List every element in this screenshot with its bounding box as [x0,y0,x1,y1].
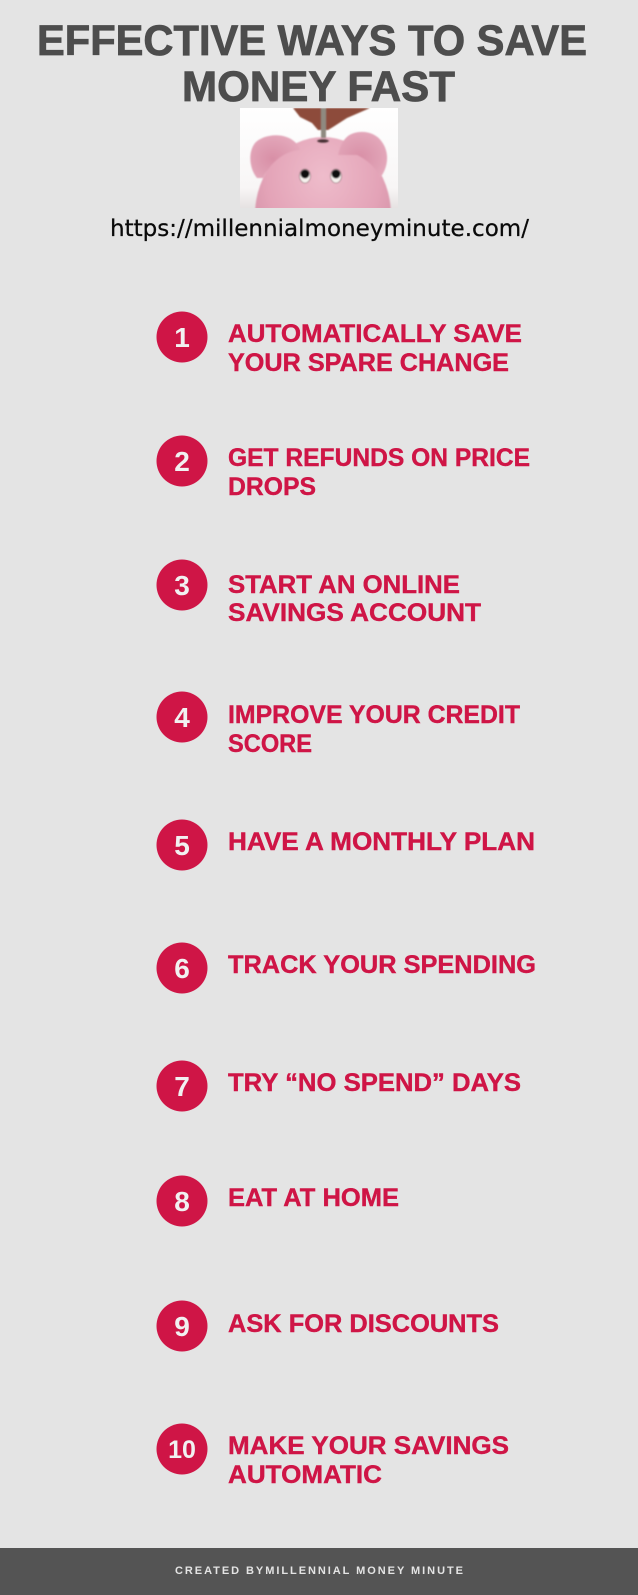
item 4: 4 [174,702,190,733]
item 5: 5 [174,830,190,861]
item 2: 2 [174,446,190,477]
footer: CREATED BYMILLENNIAL MONEY MINUTE [175,1565,463,1577]
item 3: SAVINGS ACCOUNT [228,599,481,627]
item 5 [156,820,535,870]
title [37,17,587,111]
item 6: 6 [174,953,190,984]
icon: coin slot [317,139,329,143]
item 4: SCORE [228,730,312,758]
image: piggy bank with coin [240,108,398,208]
icon: left eye [300,169,310,183]
icon: right ear [338,132,387,178]
item 6 [156,942,536,994]
item 3: 3 [174,570,190,601]
item 10: 10 [168,1436,196,1464]
item 1: YOUR SPARE CHANGE [228,349,509,377]
item 5: HAVE A MONTHLY PLAN [228,828,535,856]
item 8: EAT AT HOME [228,1184,399,1212]
item 9: 9 [174,1311,190,1342]
item 8: 8 [174,1186,190,1217]
icon: pig body [254,136,392,208]
item 2 [156,436,530,501]
title: MONEY FAST [182,63,455,111]
item 3 [156,560,481,627]
item 3: START AN ONLINE [228,571,460,599]
item 2: GET REFUNDS ON PRICE [228,444,530,472]
footer [0,1548,638,1595]
item 8 [156,1176,399,1226]
url text: https://millennialmoneyminute.com/ [110,216,529,242]
item 7: TRY “NO SPEND” DAYS [228,1069,521,1097]
item 1: 1 [174,322,190,353]
icon: left ear [250,135,300,178]
item 1: AUTOMATICALLY SAVE [228,320,522,348]
item 10: MAKE YOUR SAVINGS [228,1432,509,1460]
title: EFFECTIVE WAYS TO SAVE [37,17,587,65]
item 10 [156,1424,509,1489]
item 6: TRACK YOUR SPENDING [228,951,536,979]
item 4: IMPROVE YOUR CREDIT [228,701,520,729]
item 9: ASK FOR DISCOUNTS [228,1310,499,1338]
item 7: 7 [174,1071,190,1102]
icon: right eye [330,169,342,183]
icon: coin [321,108,326,138]
item 7 [156,1060,521,1112]
item 10: AUTOMATIC [228,1461,382,1489]
item 4 [156,692,520,758]
item 2: DROPS [228,473,316,501]
item 9 [156,1300,499,1352]
item 1 [156,312,522,377]
icon: hand [293,108,370,130]
